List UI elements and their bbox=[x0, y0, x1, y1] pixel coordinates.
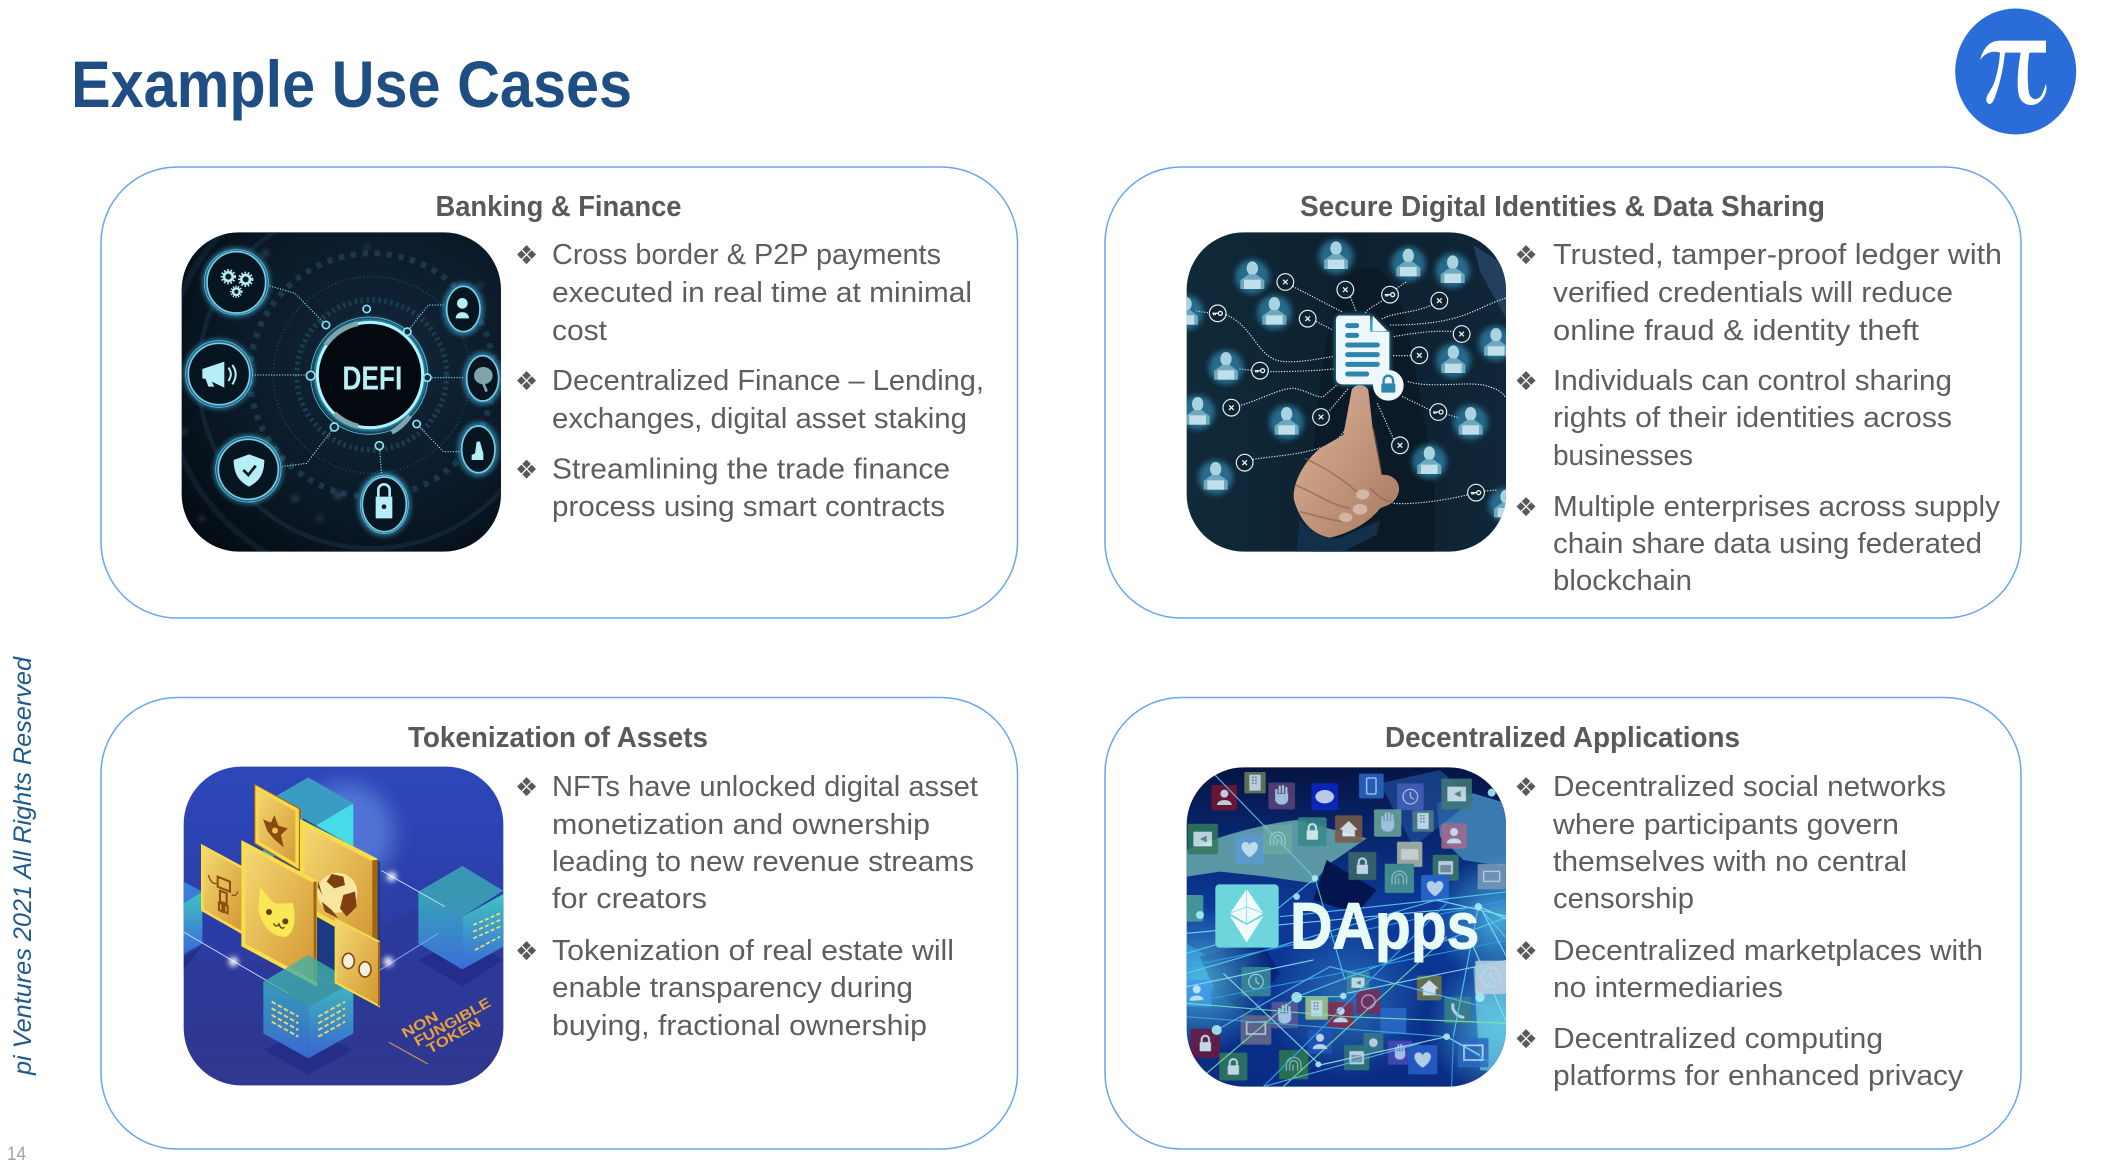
central DEFI ring bbox=[306, 305, 431, 450]
NON FUNGIBLE TOKEN label: NON bbox=[399, 1008, 441, 1041]
image: NFT isometric bbox=[184, 766, 504, 1086]
bullet list: ❖ bbox=[515, 241, 538, 271]
lock badge bbox=[1373, 370, 1404, 401]
bullet list: Trusted, tamper-proof ledger with bbox=[1553, 239, 2002, 271]
NON FUNGIBLE TOKEN label: FUNGIBLE bbox=[411, 994, 493, 1049]
bullet list: Multiple enterprises across supply bbox=[1553, 491, 2000, 523]
bullet list: NFTs have unlocked digital asset bbox=[552, 771, 978, 803]
DApps wordmark: DApps bbox=[1290, 889, 1479, 962]
tablet bbox=[222, 818, 380, 970]
bullet list: executed in real time at minimal bbox=[552, 277, 972, 309]
image: DeFi network bbox=[182, 232, 501, 552]
cat card bbox=[243, 843, 315, 983]
copyright side note: pi Ventures 2021 All Rights Reserved bbox=[9, 656, 37, 1076]
bullet list: for creators bbox=[552, 883, 707, 915]
satellite ring glow bbox=[187, 251, 499, 533]
NON FUNGIBLE TOKEN label: TOKEN bbox=[424, 1014, 483, 1057]
NON FUNGIBLE TOKEN label bbox=[401, 998, 492, 1052]
person bbox=[457, 298, 468, 309]
panel: Secure Digital Identities & Data Sharing bbox=[1105, 167, 2021, 618]
bullet list: Streamlining the trade finance bbox=[552, 454, 950, 486]
glasses card bbox=[336, 919, 379, 1006]
bullet list: themselves with no central bbox=[1553, 846, 1907, 878]
bullet list: ❖ bbox=[515, 367, 538, 397]
hand bbox=[1294, 385, 1399, 538]
bullet list: no intermediaries bbox=[1553, 972, 1783, 1004]
bullet list bbox=[1514, 771, 1983, 1092]
people icons bbox=[1169, 239, 1523, 522]
bullet list: ❖ bbox=[515, 773, 538, 803]
bullet list: Tokenization of real estate will bbox=[552, 935, 954, 967]
soccer card bbox=[302, 823, 375, 947]
bullet list: ❖ bbox=[1514, 937, 1538, 967]
bullet list: blockchain bbox=[1553, 565, 1692, 597]
lock bbox=[376, 497, 392, 518]
light beams bbox=[184, 871, 445, 993]
bullet list bbox=[515, 771, 978, 1042]
haze bbox=[1127, 853, 1573, 1100]
bullet list: enable transparency during bbox=[552, 972, 913, 1004]
central DEFI ring: DEFI bbox=[342, 361, 402, 398]
title: Example Use Cases bbox=[71, 47, 632, 121]
tower bbox=[472, 442, 483, 460]
network lines bbox=[1187, 773, 1508, 1087]
bullet list: rights of their identities across bbox=[1553, 402, 1952, 434]
bullet list: cost bbox=[552, 315, 607, 347]
bullet list: exchanges, digital asset staking bbox=[552, 403, 967, 435]
megaphone bbox=[202, 362, 236, 388]
page number: 14 bbox=[7, 1144, 26, 1165]
bullet list: process using smart contracts bbox=[552, 491, 945, 523]
connection lines bbox=[1197, 282, 1505, 504]
bullet list: buying, fractional ownership bbox=[552, 1010, 927, 1042]
bullet list: chain share data using federated bbox=[1553, 528, 1982, 560]
star card bbox=[255, 785, 300, 870]
robot card bbox=[202, 846, 243, 933]
bottom cube bbox=[263, 955, 353, 1058]
bullet list: Decentralized marketplaces with bbox=[1553, 935, 1983, 967]
bullet list: leading to new revenue streams bbox=[552, 846, 974, 878]
panel: Decentralized Applications bbox=[1105, 698, 2021, 1149]
satellite rings bbox=[186, 250, 499, 534]
bullet list: ❖ bbox=[1514, 493, 1538, 523]
document icon bbox=[1336, 316, 1389, 384]
bullet list: Decentralized Finance – Lending, bbox=[552, 365, 984, 397]
bullet list: ❖ bbox=[515, 937, 538, 967]
sleeve bbox=[1297, 520, 1380, 553]
badges bbox=[1209, 274, 1484, 501]
bullet list: ❖ bbox=[1514, 367, 1538, 397]
logo: pi symbol bbox=[1955, 8, 2076, 134]
brain bbox=[474, 367, 493, 384]
bullet list: Decentralized social networks bbox=[1553, 771, 1946, 803]
cube shadows bbox=[184, 937, 503, 1075]
bullet list bbox=[1514, 239, 2002, 597]
bullet list: Cross border & P2P payments bbox=[552, 239, 941, 271]
top cube bbox=[263, 777, 353, 880]
app icons bbox=[1180, 772, 1506, 1081]
heading: Tokenization of Assets: Tokenization of Assets bbox=[408, 722, 708, 754]
bullet list: ❖ bbox=[1514, 241, 1538, 271]
ethereum badge bbox=[1215, 884, 1279, 948]
bullet list: Individuals can control sharing bbox=[1553, 365, 1952, 397]
bullet list: platforms for enhanced privacy bbox=[1553, 1060, 1964, 1092]
heading: Banking & Finance: Banking & Finance bbox=[436, 191, 682, 223]
bullet list bbox=[515, 239, 984, 523]
bullet list: censorship bbox=[1553, 883, 1694, 915]
bullet list: ❖ bbox=[1514, 1025, 1538, 1055]
bullet list: businesses bbox=[1553, 440, 1693, 472]
gears bbox=[222, 270, 252, 297]
bullet list: ❖ bbox=[515, 456, 538, 486]
left cube bbox=[184, 882, 202, 954]
bullet list: where participants govern bbox=[1552, 809, 1899, 841]
connector lines bbox=[250, 286, 465, 475]
world map bbox=[1187, 770, 1508, 1073]
bullet list: verified credentials will reduce bbox=[1553, 277, 1953, 309]
bullet list: monetization and ownership bbox=[552, 809, 930, 841]
heading: Decentralized Applications: Decentralized Applications bbox=[1385, 722, 1740, 754]
bullet list: online fraud & identity theft bbox=[1553, 315, 1919, 347]
right cube bbox=[418, 866, 503, 969]
image: digital identity network bbox=[1186, 232, 1506, 552]
panel: Banking & Finance bbox=[101, 167, 1018, 618]
image: DApps collage bbox=[1186, 767, 1506, 1087]
panel: Tokenization of Assets bbox=[101, 698, 1018, 1149]
shield bbox=[234, 454, 264, 487]
bullet list: Decentralized computing bbox=[1553, 1023, 1883, 1055]
heading: Secure Digital Identities & Data Sharing: Secure Digital Identities & Data Sharing bbox=[1300, 191, 1825, 223]
bullet list: ❖ bbox=[1514, 773, 1538, 803]
